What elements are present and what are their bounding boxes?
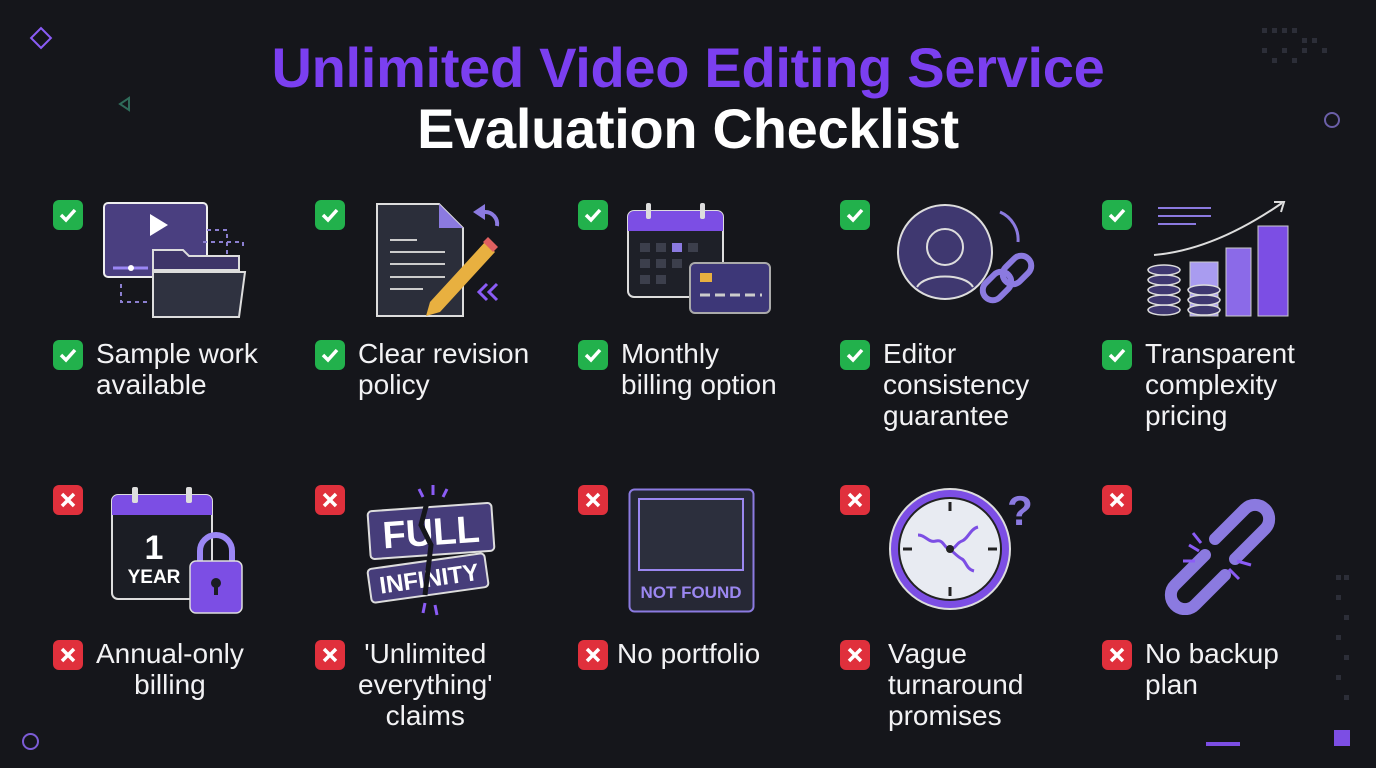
decoration: dot grid	[1262, 28, 1327, 63]
item: vague turnaround: turnaround	[888, 669, 1023, 700]
text: promises	[888, 700, 1002, 731]
item: unlimited claims: everything'	[358, 669, 493, 700]
item: vague turnaround	[840, 485, 1033, 731]
icon: document pencil	[376, 203, 500, 317]
decoration: circle	[1324, 112, 1340, 128]
item: no portfolio: No portfolio	[617, 638, 760, 669]
item: annual-only billing	[53, 485, 244, 700]
icon: avatar link	[897, 204, 1034, 304]
icon: calendar lock: 1	[145, 529, 163, 567]
item: no portfolio	[578, 485, 760, 670]
decoration: circle bottom	[22, 733, 39, 750]
title line 1: Unlimited Video Editing Service	[272, 36, 1104, 99]
text: claims	[386, 700, 465, 731]
item: revision policy: Clear revision	[358, 338, 529, 369]
decoration: triangle	[118, 96, 130, 112]
icon: broken banners	[366, 485, 496, 616]
item: sample work	[53, 200, 258, 400]
icon: bar chart coins	[1147, 201, 1288, 316]
item: transparent pricing: complexity	[1145, 369, 1277, 400]
item: sample work: available	[96, 369, 207, 400]
item: no backup plan: No backup	[1145, 638, 1279, 669]
icon: broken banners: INFINITY	[378, 559, 481, 600]
icon: calendar card	[627, 203, 771, 314]
item: unlimited claims: 'Unlimited	[364, 638, 486, 669]
item: transparent pricing	[1102, 200, 1295, 431]
item: monthly billing: Monthly	[621, 338, 719, 369]
title line 2: Evaluation Checklist	[417, 97, 959, 160]
item: editor consistency	[840, 200, 1034, 431]
item: editor consistency: guarantee	[883, 400, 1009, 431]
icon: calendar lock	[111, 487, 243, 614]
icon: calendar lock: YEAR	[128, 567, 181, 588]
item: unlimited claims	[315, 485, 496, 731]
item: editor consistency: Editor	[883, 338, 956, 369]
decoration: side dots	[1336, 575, 1349, 700]
icon: broken banners: FULL	[381, 509, 481, 557]
item: revision policy: policy	[358, 369, 430, 400]
item: sample work: Sample work	[96, 338, 258, 369]
icon: not found frame: NOT FOUND	[640, 583, 742, 602]
icon: broken chain	[1164, 498, 1276, 615]
item: monthly billing: billing option	[621, 369, 777, 400]
item: no backup plan: plan	[1145, 669, 1198, 700]
item: monthly billing	[578, 200, 777, 400]
decoration: progress bar	[1206, 742, 1240, 746]
icon: clock question	[889, 487, 1033, 610]
item: annual-only billing: Annual-only	[96, 638, 244, 669]
item: vague turnaround: Vague	[888, 638, 967, 669]
icon: clock question: ?	[1007, 487, 1033, 534]
item: transparent pricing: pricing	[1145, 400, 1227, 431]
item: transparent pricing: Transparent	[1145, 338, 1295, 369]
item: annual-only billing: billing	[134, 669, 206, 700]
icon: video folder	[103, 202, 246, 318]
icon: not found frame	[628, 488, 754, 612]
item: revision policy	[315, 200, 529, 400]
decoration: diamond	[30, 27, 52, 49]
item: editor consistency: consistency	[883, 369, 1029, 400]
item: no backup plan	[1102, 485, 1279, 700]
